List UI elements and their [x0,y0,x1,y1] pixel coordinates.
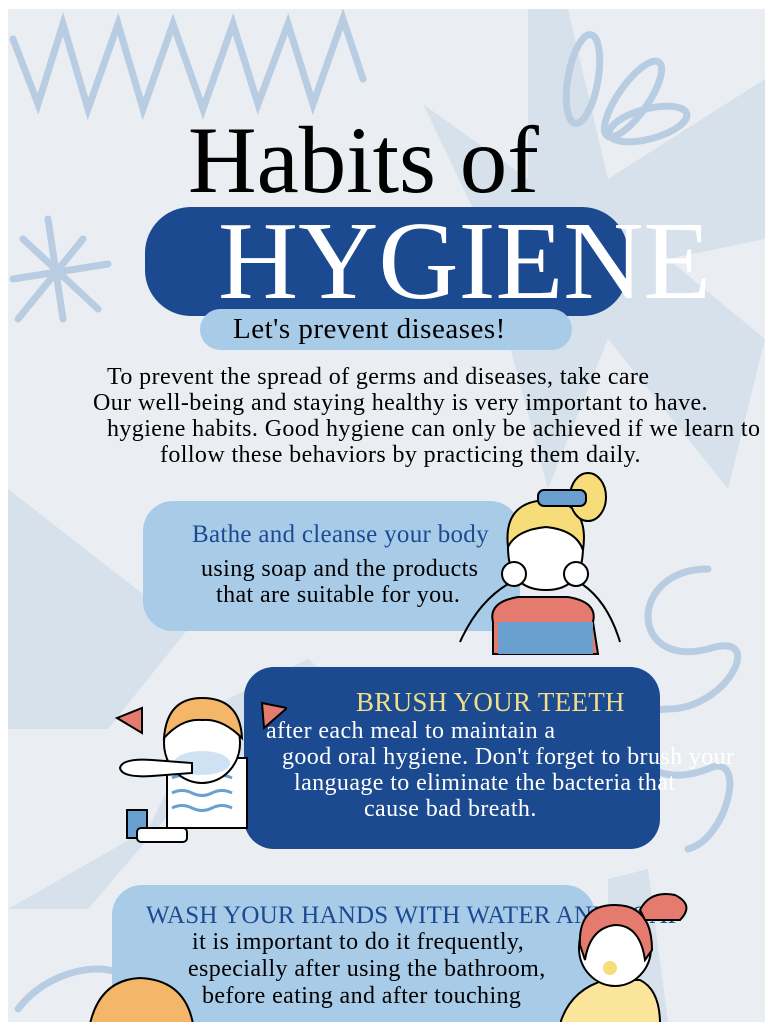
title: Habits of: Habits of [188,107,539,213]
wash text: WASH YOUR HANDS WITH WATER AND SOAP [146,902,682,929]
brush text: language to eliminate the bacteria that [294,770,675,796]
intro text: To prevent the spread of germs and diseases, take care [107,364,649,390]
intro text: follow these behaviors by practicing them daily. [160,442,641,468]
panel: bathe [143,501,520,631]
brush text: BRUSH YOUR TEETH [356,687,625,717]
wash text: especially after using the bathroom, [188,956,546,982]
panel: brush teeth [244,667,660,849]
subtitle pill: Let's prevent diseases! [233,313,506,345]
icon: girl brushing teeth [114,697,287,843]
brush text: good oral hygiene. Don't forget to brush your [282,744,734,770]
brush text: after each meal to maintain a [266,718,555,744]
wash text [146,902,682,1009]
title: HYGIENE: HYGIENE [218,200,711,323]
panel: bathe: Bathe and cleanse your body [192,521,489,548]
brush text: cause bad breath. [364,796,537,822]
panel: bathe: that are suitable for you. [216,582,460,608]
wash text: it is important to do it frequently, [192,929,524,955]
subtitle pill [200,309,572,350]
wash text: before eating and after touching [202,983,521,1009]
panel: wash hands [112,885,595,1022]
icon: orange hair child [90,977,194,1022]
title pill [145,207,628,316]
intro text [93,364,760,468]
icon: girl washing face [459,472,621,655]
brush text [266,687,734,822]
intro text: hygiene habits. Good hygiene can only be achieved if we learn to [107,416,760,442]
panel: bathe: using soap and the products [201,556,478,582]
intro text: Our well-being and staying healthy is very important to have. [93,390,708,416]
icon: girl with red hair [560,893,688,1022]
